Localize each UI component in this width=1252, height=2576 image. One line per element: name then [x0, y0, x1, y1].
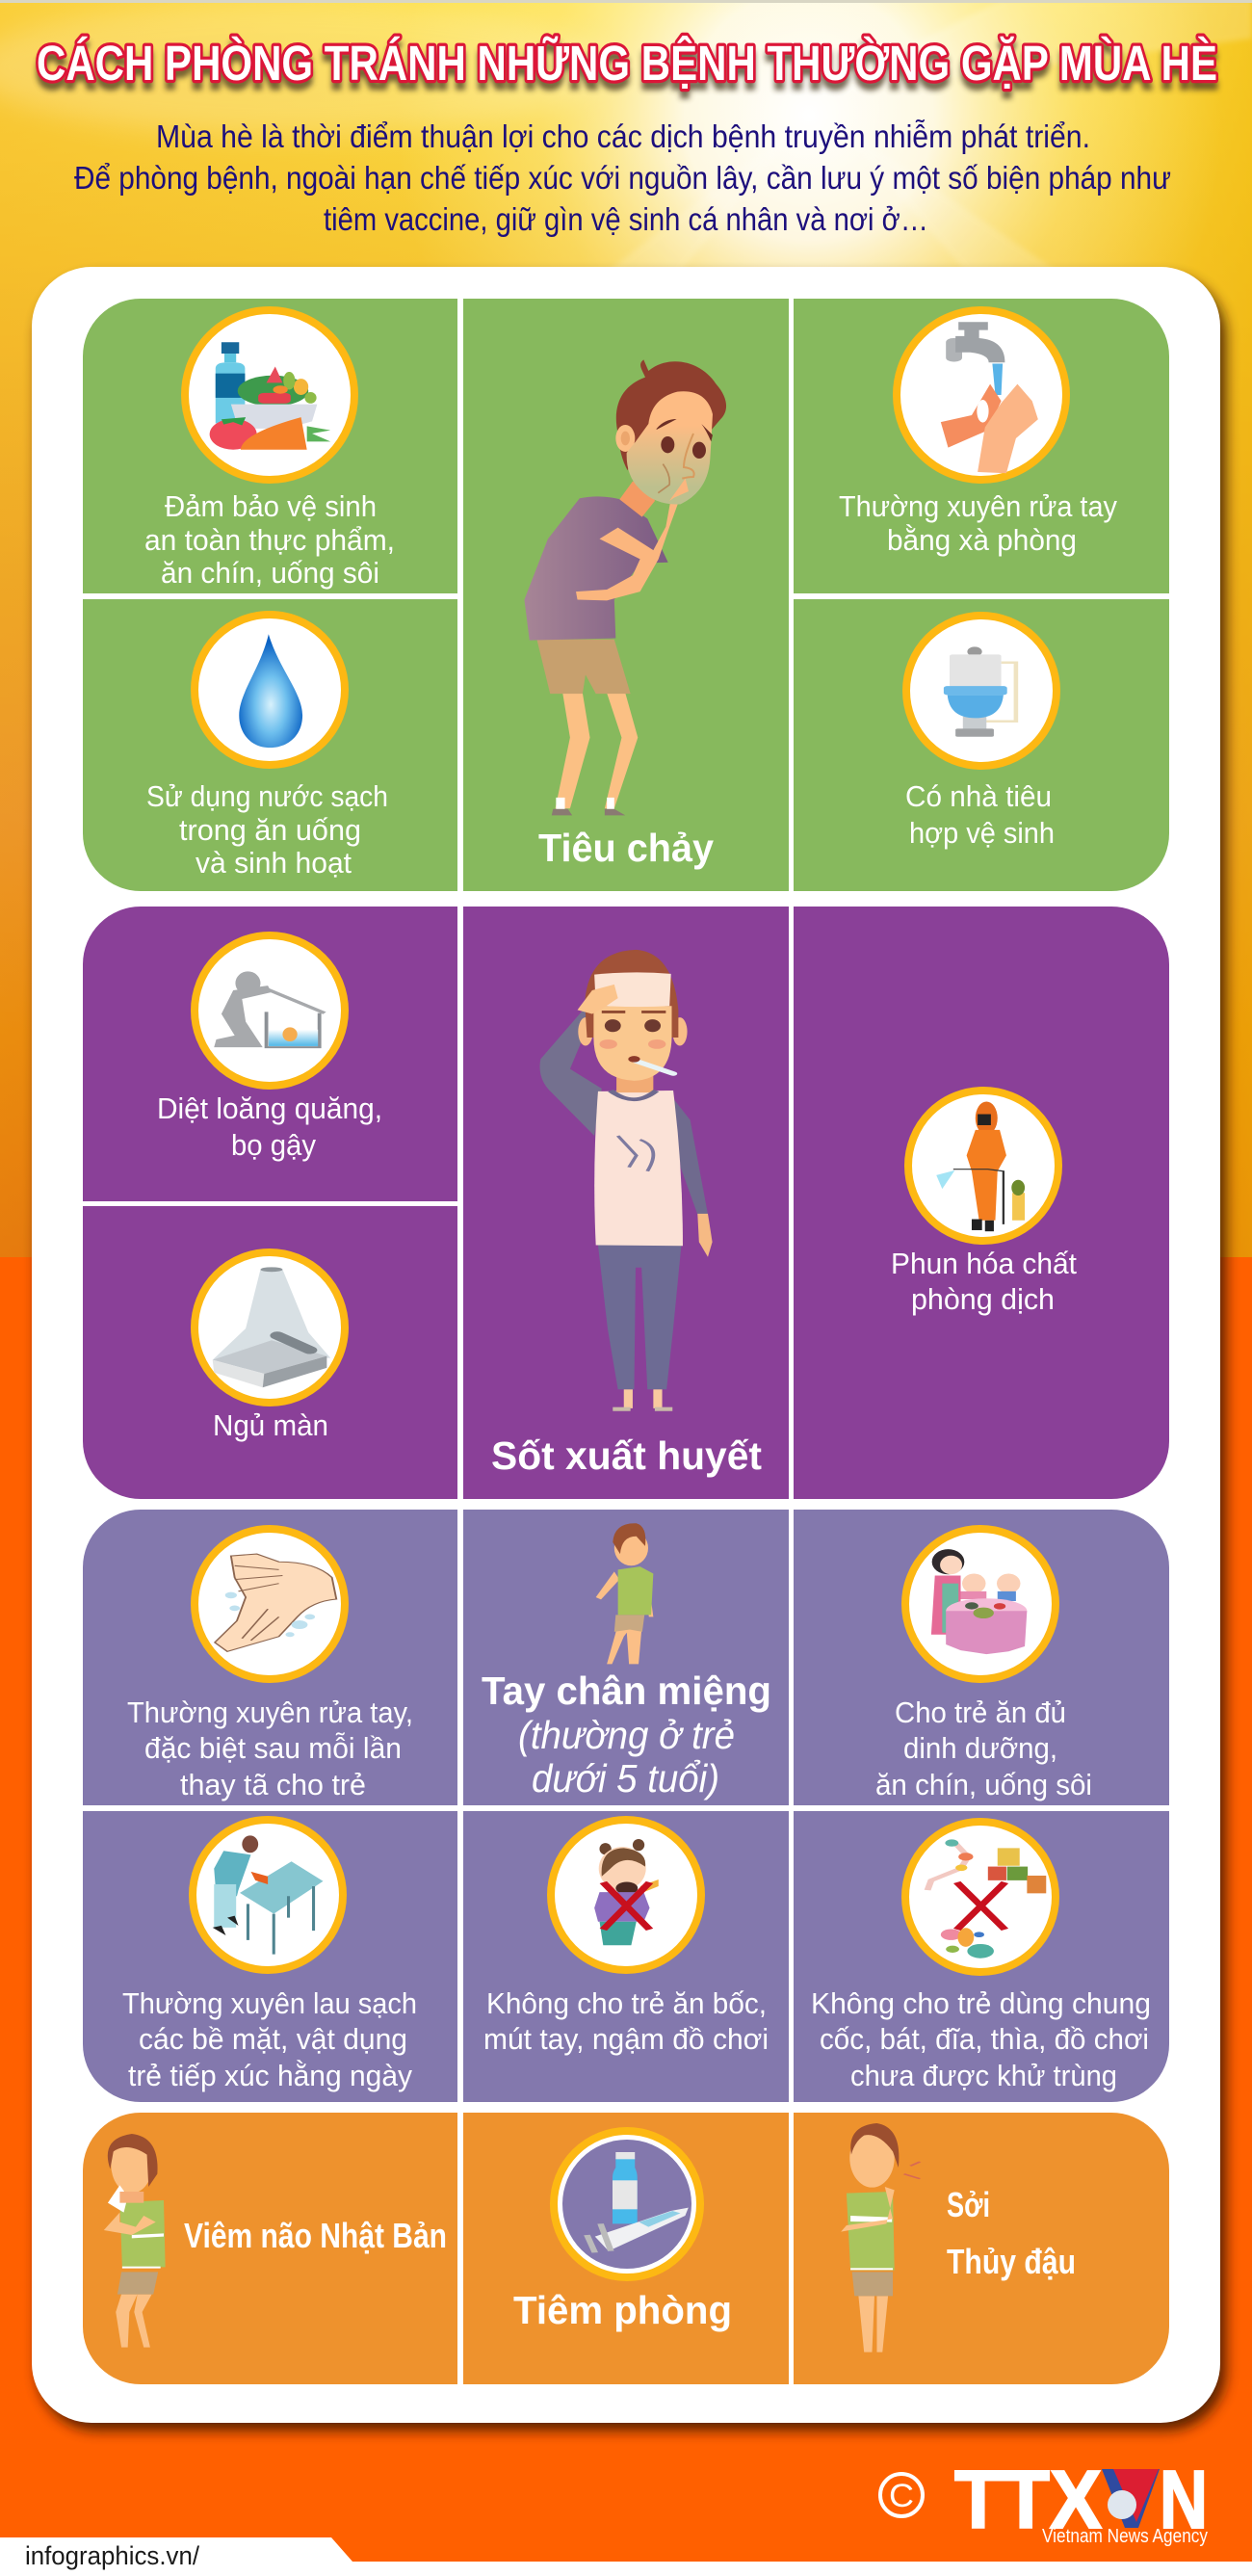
caption: clean water	[146, 779, 388, 880]
caption: no eating with hands: mút tay, ngậm đồ chơi	[483, 2022, 769, 2056]
caption: wash hands	[839, 489, 1117, 557]
logo: TTXVN: Vietnam News Agency	[1042, 2526, 1208, 2547]
labels: measles and chickenpox: Thủy đậu	[947, 2242, 1076, 2281]
caption: sleep under net: Ngủ màn	[213, 1408, 328, 1442]
heading: hand foot mouth disease: (thường ở trẻ	[518, 1713, 735, 1757]
labels: measles and chickenpox	[947, 2185, 1076, 2281]
caption: hand washing for children	[127, 1695, 413, 1801]
caption: food safety: an toàn thực phẩm,	[144, 523, 395, 557]
caption: spraying: phòng dịch	[911, 1282, 1055, 1316]
heading: diarrhea: Tiêu chảy	[538, 826, 714, 870]
caption: hand washing for children: đặc biệt sau mỗi lần	[144, 1731, 402, 1765]
icon: removing larvae	[195, 935, 345, 1086]
caption: food safety	[144, 489, 395, 590]
caption: spraying	[891, 1247, 1077, 1316]
caption: clean surfaces: trẻ tiếp xúc hằng ngày	[128, 2059, 412, 2092]
caption: food safety: ăn chín, uống sôi	[161, 556, 379, 590]
icon: girl eating with hands, crossed	[551, 1820, 701, 1970]
illustration: man with diarrhea	[524, 359, 726, 815]
caption: nutrition: ăn chín, uống sôi	[875, 1768, 1092, 1801]
caption: hand washing for children: Thường xuyên rửa tay,	[127, 1695, 413, 1729]
labels: measles and chickenpox: Sởi	[947, 2185, 990, 2224]
illustration: man with fever	[540, 950, 713, 1411]
caption: nutrition: dinh dưỡng,	[903, 1731, 1057, 1765]
heading: dengue: Sốt xuất huyết	[491, 1433, 762, 1478]
icon: soapy hands	[195, 1529, 345, 1679]
intro text: tiêm vaccine, giữ gìn vệ sinh cá nhân và nơi ở…	[324, 201, 928, 237]
caption: hand washing for children: thay tã cho trẻ	[180, 1768, 366, 1801]
caption: clean water: trong ăn uống	[179, 813, 361, 847]
heading: hand foot mouth disease: Tay chân miệng	[482, 1669, 771, 1713]
intro text	[74, 118, 1171, 237]
logo: TTXVN: TTX	[954, 2455, 1102, 2546]
caption: wash hands: bằng xà phòng	[887, 523, 1077, 557]
caption: kill larvae	[157, 1091, 382, 1162]
caption: no eating with hands	[483, 1986, 769, 2056]
source url: infographics.vn/	[25, 2541, 199, 2570]
caption: nutrition	[875, 1695, 1092, 1801]
caption: wash hands: Thường xuyên rửa tay	[839, 489, 1117, 523]
caption: toilet: Có nhà tiêu	[905, 779, 1052, 813]
heading: hand foot mouth disease	[482, 1669, 771, 1801]
icon: toys, crossed	[905, 1822, 1056, 1972]
white card	[32, 267, 1220, 2423]
caption: no shared items: cốc, bát, đĩa, thìa, đồ chơi	[820, 2022, 1149, 2056]
caption: toilet: hợp vệ sinh	[909, 816, 1055, 850]
heading: hand foot mouth disease: dưới 5 tuổi)	[532, 1756, 719, 1801]
caption: no shared items: chưa được khử trùng	[850, 2059, 1117, 2092]
copyright symbol: C	[889, 2478, 914, 2514]
caption: no shared items: Không cho trẻ dùng chung	[811, 1986, 1151, 2020]
illustration: man with handkerchief	[104, 2134, 166, 2348]
panel: diarrhea (green)	[83, 299, 1169, 891]
copyright symbol	[880, 2474, 923, 2516]
illustration: man with earache	[841, 2123, 920, 2353]
panel: vaccination (orange)	[83, 2113, 1169, 2384]
caption: food safety: Đảm bảo vệ sinh	[165, 489, 377, 523]
panel: hand foot mouth (periwinkle)	[83, 1510, 1169, 2102]
caption: spraying: Phun hóa chất	[891, 1247, 1077, 1280]
icon: chemical spraying	[908, 1091, 1058, 1241]
icon: family at table	[905, 1529, 1056, 1679]
icon: toilet	[906, 616, 1056, 766]
caption: kill larvae: Diệt loăng quăng,	[157, 1091, 382, 1125]
caption: clean water: Sử dụng nước sạch	[146, 779, 388, 813]
label: Japanese encephalitis: Viêm não Nhật Bản	[184, 2216, 447, 2255]
white card shadow	[38, 276, 1226, 2431]
caption: clean water: và sinh hoạt	[196, 846, 352, 880]
icon: water drop	[195, 615, 345, 765]
caption: clean surfaces: Thường xuyên lau sạch	[122, 1986, 417, 2020]
panel: dengue (purple)	[83, 907, 1169, 1499]
icon: food and bottle	[185, 310, 354, 480]
logo: TTXVN: N	[1160, 2455, 1208, 2546]
caption: kill larvae: bọ gậy	[231, 1128, 316, 1162]
intro text: Mùa hè là thời điểm thuận lợi cho các dịch bệnh truyền nhiễm phát triển.	[156, 118, 1090, 154]
logo: TTXVN	[954, 2455, 1208, 2547]
caption: no eating with hands: Không cho trẻ ăn bốc,	[486, 1986, 767, 2020]
icon: tap and hands	[897, 310, 1066, 480]
icon: vaccine and syringe	[554, 2131, 700, 2277]
icon: mosquito net	[195, 1252, 345, 1403]
caption: toilet	[905, 779, 1055, 850]
caption: clean surfaces	[122, 1986, 417, 2092]
footer strip	[0, 2537, 1252, 2576]
caption: clean surfaces: các bề mặt, vật dụng	[139, 2022, 407, 2056]
icon: cleaning table	[193, 1820, 343, 1970]
illustration: sick child	[596, 1523, 653, 1664]
heading: vaccination: Tiêm phòng	[513, 2288, 732, 2332]
caption: nutrition: Cho trẻ ăn đủ	[895, 1695, 1066, 1729]
caption: no shared items	[811, 1986, 1151, 2092]
